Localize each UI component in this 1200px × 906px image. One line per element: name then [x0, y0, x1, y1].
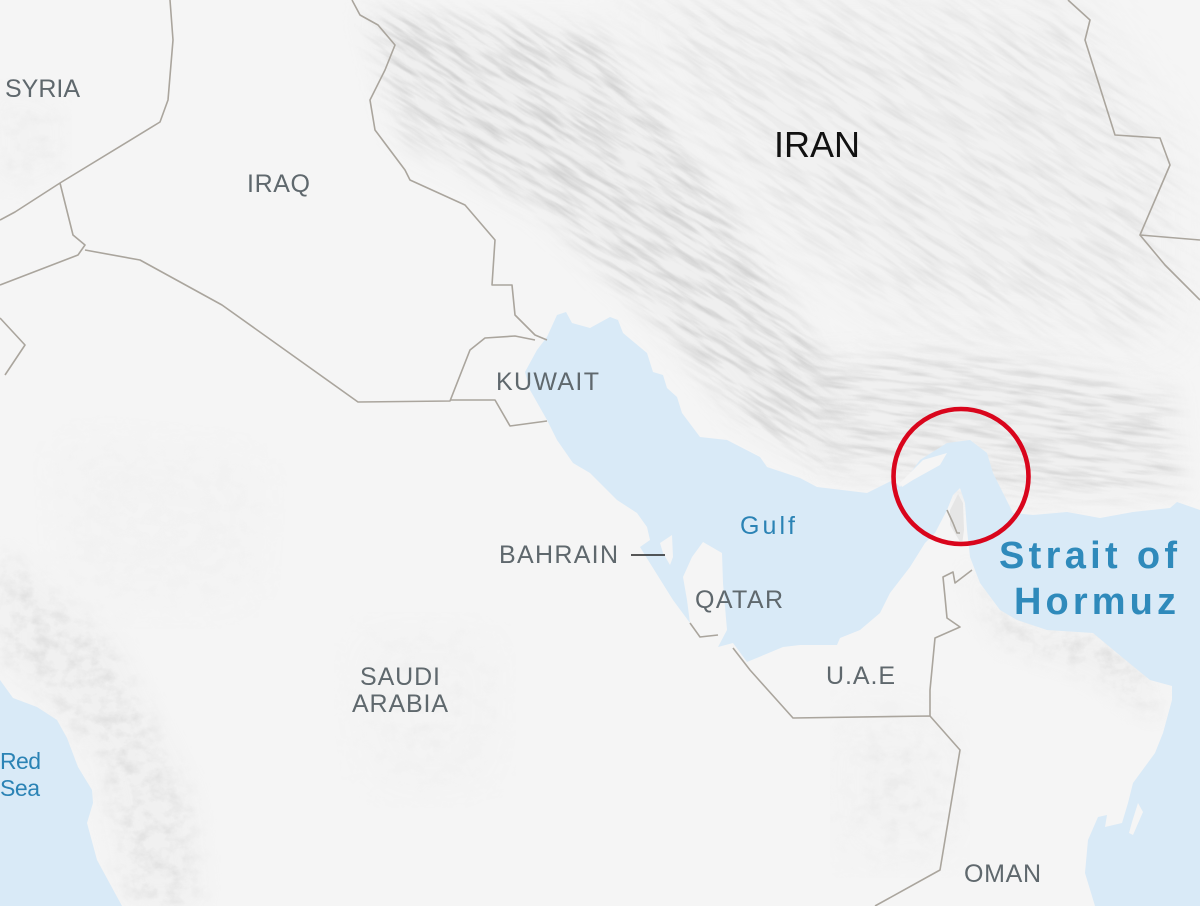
label: Strait of Hormuz: Hormuz	[1014, 581, 1176, 623]
label: Kuwait: KUWAIT	[496, 368, 599, 396]
label: Syria: SYRIA	[5, 75, 80, 103]
label: Gulf: Gulf	[740, 512, 795, 540]
islands: Bahrain, Qeshm, Masirah	[660, 453, 1143, 835]
label: Bahrain: BAHRAIN	[499, 541, 618, 569]
water: Red Sea	[0, 680, 122, 906]
musandam peninsula shading	[950, 494, 964, 545]
label: Saudi Arabia	[352, 663, 448, 718]
label: Saudi Arabia: SAUDI	[360, 663, 440, 691]
water: Gulf, Gulf of Oman and Arabian Sea	[525, 312, 1200, 906]
label: U.A.E: U.A.E	[826, 662, 895, 690]
label: Iran: IRAN	[774, 124, 860, 165]
label: Red Sea	[0, 748, 41, 801]
label: Saudi Arabia: ARABIA	[352, 690, 448, 718]
label: Qatar: QATAR	[695, 586, 783, 614]
label: Oman: OMAN	[964, 860, 1041, 888]
label: Strait of Hormuz: Strait of	[999, 535, 1177, 577]
label: Red Sea: Sea	[0, 775, 40, 801]
label: Strait of Hormuz	[999, 535, 1177, 623]
label: Iraq: IRAQ	[247, 170, 310, 198]
terrain shading: Zagros mountains, north-west range	[367, 0, 1175, 464]
bahrain leader line	[631, 554, 665, 556]
highlight circle: Strait of Hormuz	[894, 409, 1028, 544]
label: Red Sea: Red	[0, 748, 41, 774]
terrain shading: Zagros mountains, south-east range	[815, 346, 1184, 502]
terrain shading: Arabian peninsula and Oman mountains	[0, 573, 1146, 904]
